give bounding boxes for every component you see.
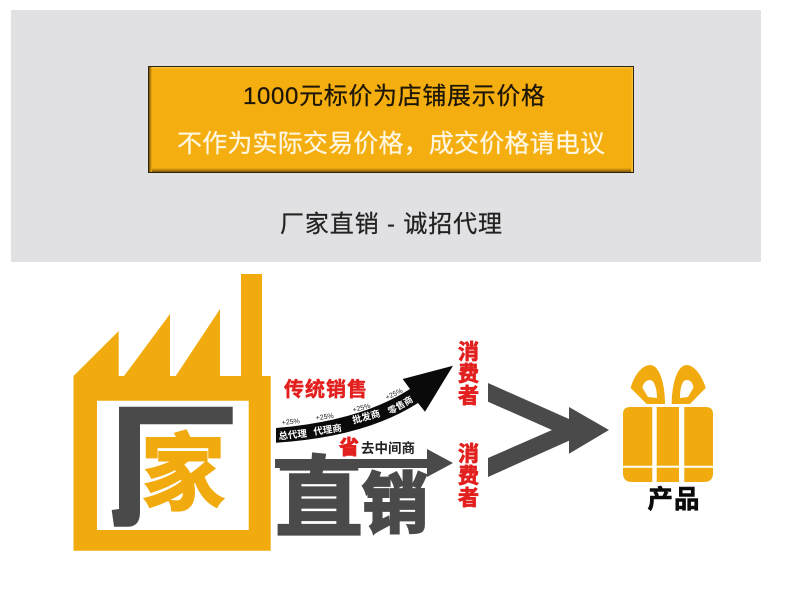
text: product: 产品 — [648, 486, 700, 514]
text: traditional sales heading: 传统销售 — [284, 377, 367, 401]
group: traditional sales route — [276, 341, 479, 443]
label: markup 3: +25% — [352, 403, 371, 414]
text: cut out the middlemen: 去中间商 — [361, 440, 415, 456]
label: markup 4: +25% — [385, 388, 404, 402]
arrow: direct sales arrow — [275, 449, 453, 477]
text: direct sales 直销 — [275, 449, 428, 548]
text: consumer, lower: 费 — [458, 465, 479, 488]
group: direct sales route — [275, 436, 479, 548]
icon: gift box — [623, 365, 713, 514]
label: markup 2: +25% — [315, 413, 334, 422]
panel: orange price box — [148, 66, 634, 172]
text: consumer, lower: 消 — [458, 443, 479, 466]
label: agent: 代理商 — [313, 422, 343, 438]
icon: grey radical of the character 厂 — [112, 407, 233, 527]
text: direct sales 直销: 销 — [362, 467, 428, 541]
label: retailer: 零售商 — [386, 393, 415, 416]
label: general agent: 总代理 — [278, 428, 308, 442]
arrow: rising black curved arrow — [276, 366, 453, 443]
text: consumer, lower: 者 — [458, 487, 479, 510]
label: markup 1: +25% — [281, 418, 300, 427]
text: factory direct recruiting agents: 厂家直销 - 诚招代理 — [280, 211, 502, 238]
text: negotiation line: 不作为实际交易价格，成交价格请电议 — [177, 130, 605, 158]
text: consumer, lower — [458, 443, 479, 510]
icon: gift bow — [631, 365, 706, 404]
icon: gift body — [623, 407, 713, 482]
text: consumer, upper — [458, 341, 479, 408]
arrow: converging grey chevron arrow — [488, 383, 609, 477]
text: direct sales 直销: 直 — [275, 449, 363, 548]
text: consumer, upper: 者 — [458, 385, 479, 408]
text: save: 省 — [339, 436, 359, 459]
text: character 家: 家 — [141, 427, 225, 521]
text: consumer, upper: 费 — [458, 363, 479, 386]
label: wholesaler: 批发商 — [351, 408, 382, 427]
text: price line: 1000元标价为店铺展示价格 — [243, 83, 545, 110]
icon: factory building — [74, 274, 271, 551]
panel: grey price notice — [11, 10, 761, 262]
text: consumer, upper: 消 — [458, 341, 479, 364]
